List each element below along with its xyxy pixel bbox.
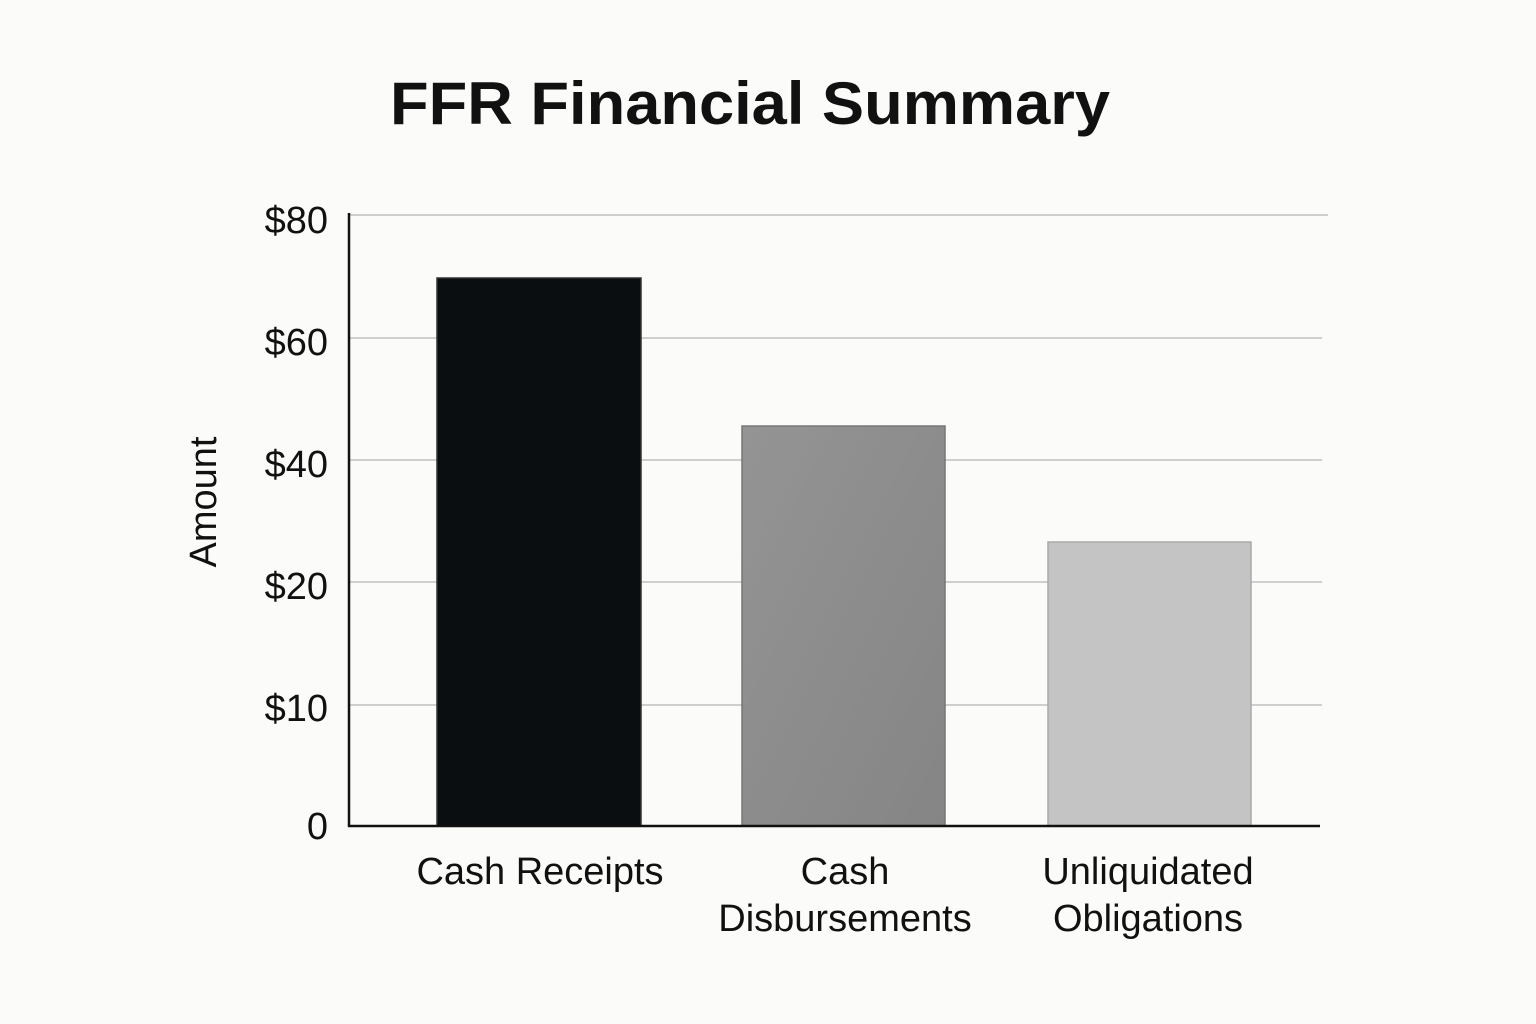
y-axis label: Amount xyxy=(183,436,225,567)
title: FFR Financial Summary xyxy=(390,70,1111,137)
y-axis tick labels: $80 xyxy=(265,200,328,242)
bar chart xyxy=(437,278,1251,826)
y-axis tick labels: $40 xyxy=(265,444,328,486)
x-axis labels: Unliquidated xyxy=(1042,851,1254,893)
y-axis tick labels xyxy=(265,200,328,848)
x-axis labels xyxy=(416,851,1254,940)
axes xyxy=(348,213,1320,827)
y-axis tick labels: $20 xyxy=(265,566,328,608)
x-axis labels: Cash xyxy=(801,851,889,893)
y-axis tick labels: $60 xyxy=(265,322,328,364)
y-axis tick labels: $10 xyxy=(265,688,328,730)
bar: Unliquidated Obligations xyxy=(1048,542,1251,826)
x-axis labels: Obligations xyxy=(1053,898,1243,940)
bar: Cash Receipts xyxy=(437,278,641,826)
x-axis labels: Disbursements xyxy=(718,898,972,940)
y-axis tick labels: 0 xyxy=(307,806,328,848)
x-axis labels: Cash Receipts xyxy=(416,851,664,893)
bar: Cash Disbursements xyxy=(742,426,945,826)
